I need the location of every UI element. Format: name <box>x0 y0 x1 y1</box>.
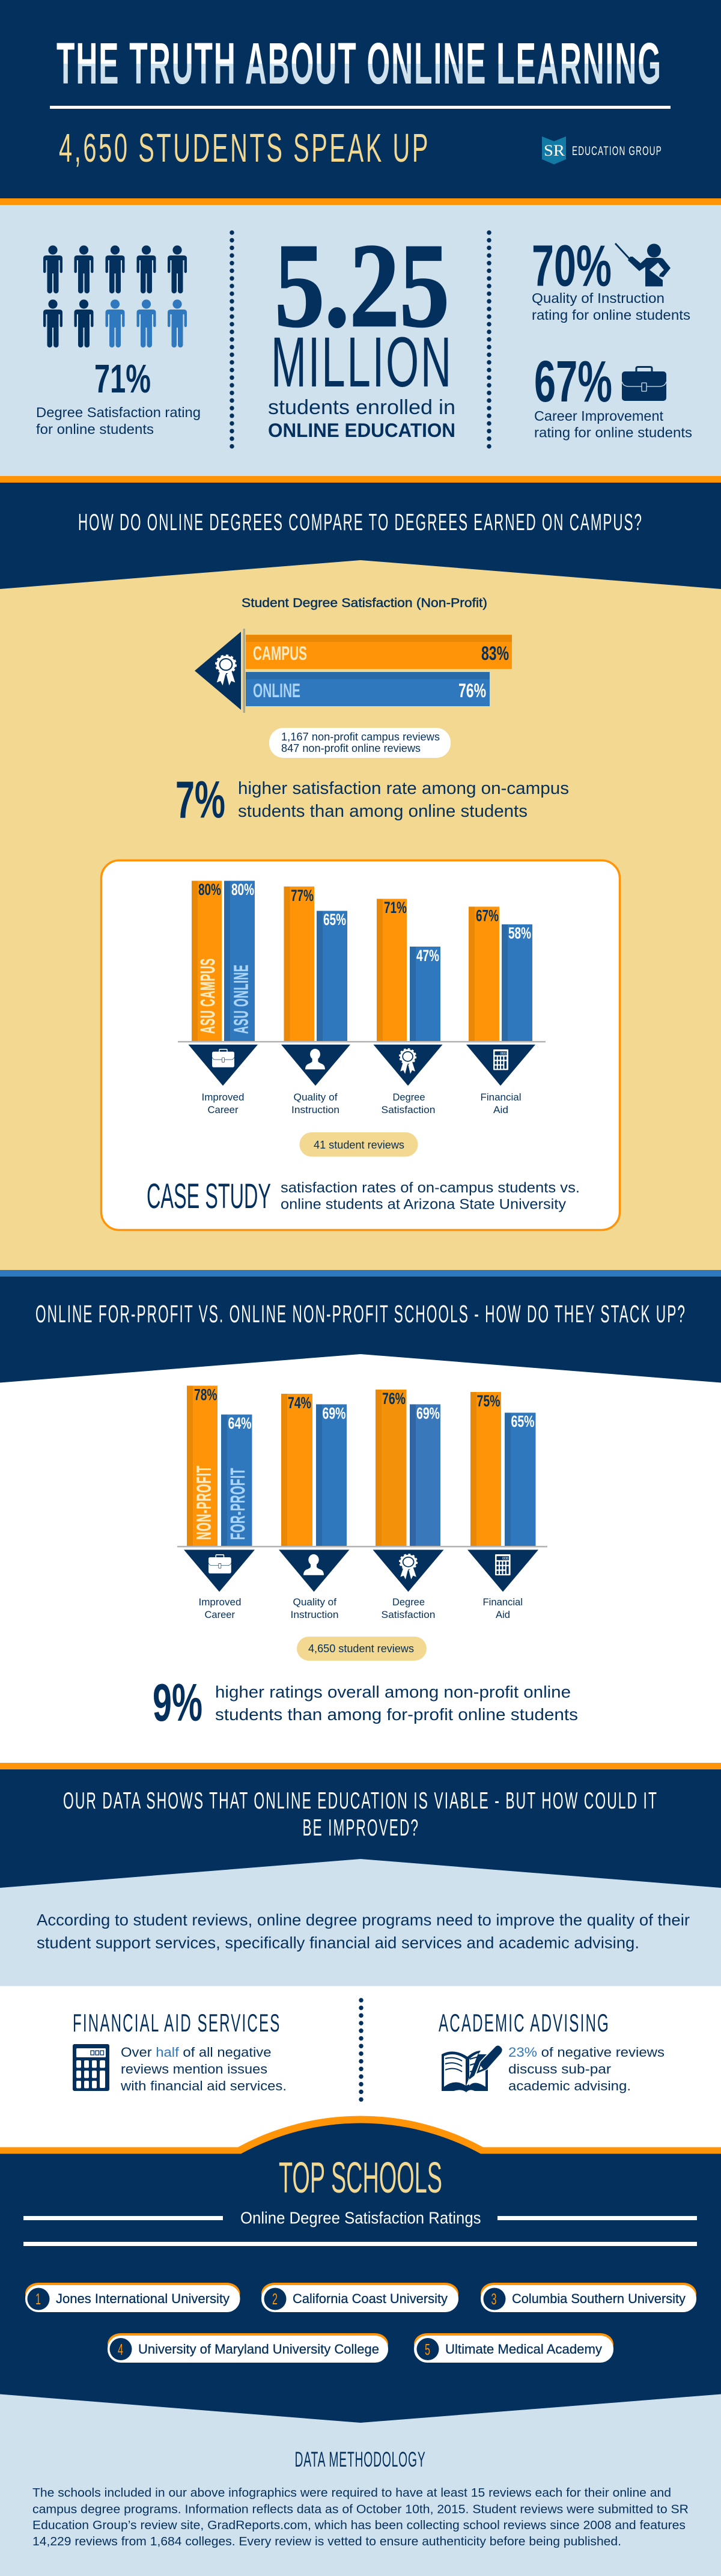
icon: award ribbon <box>216 656 236 685</box>
school 2: California Coast University <box>293 2291 448 2306</box>
school 4 <box>108 2333 388 2363</box>
bar chart: non-profit vs for-profit: 69% <box>416 1404 440 1422</box>
text: career improvement rating <box>534 408 692 440</box>
bar: online: 76% <box>458 680 486 701</box>
bar chart: ASU: ASU CAMPUS <box>196 958 219 1034</box>
icon: SR Education Group logo <box>542 136 662 165</box>
labels: categories: Career <box>204 1609 235 1620</box>
text <box>508 2045 665 2093</box>
icon: SR Education Group logo: EDUCATION GROUP <box>572 144 662 158</box>
school 5: 5 <box>425 2340 430 2358</box>
school 1 <box>25 2283 240 2312</box>
bar chart: non-profit vs for-profit: 78% <box>194 1386 218 1404</box>
school 3: 3 <box>491 2290 496 2308</box>
icon: teacher with pointer <box>615 243 671 286</box>
labels: categories: Career <box>208 1104 239 1116</box>
bar: campus <box>246 635 512 669</box>
panel: top schools <box>0 2116 721 2423</box>
text: career improvement rating: Career Improvement <box>534 408 663 424</box>
school 1: 1 <box>35 2290 41 2308</box>
icon row: category triangles <box>189 1045 535 1085</box>
labels: categories <box>198 1596 523 1620</box>
text: non-profit comparison: students than among for-profit online students <box>215 1705 578 1724</box>
bar chart: ASU: ASU ONLINE <box>230 965 252 1034</box>
subheading with rules <box>23 2208 697 2246</box>
text: career improvement rating: rating for online students <box>534 424 692 440</box>
text: non-profit comparison: higher ratings overall among non-profit online <box>215 1683 571 1701</box>
bar chart: ASU: 71% <box>384 899 407 917</box>
labels: categories: Instruction <box>291 1104 339 1116</box>
text: intro paragraph: student support services, specifically financial aid services and academic advising. <box>37 1934 639 1952</box>
text: quality of instruction rating <box>532 290 690 323</box>
text: methodology paragraph: campus degree programs. Information reflects data as of October 10th, 2015. Student reviews were submitted to SR <box>32 2503 689 2516</box>
text: satisfaction comparison <box>238 779 569 821</box>
bar: campus: CAMPUS <box>253 642 307 664</box>
school 3: Columbia Southern University <box>512 2291 686 2306</box>
labels: categories: Aid <box>496 1609 510 1620</box>
school 4: University of Maryland University College <box>138 2342 379 2357</box>
panel: page header <box>0 0 721 205</box>
heading: case study: CASE STUDY <box>147 1177 271 1216</box>
icon: SR Education Group logo: SR <box>544 142 565 159</box>
callout: review counts <box>269 728 451 758</box>
school 5 <box>414 2333 613 2363</box>
bar chart: non-profit vs for-profit: 74% <box>288 1394 311 1412</box>
bar chart: non-profit vs for-profit: 69% <box>322 1404 346 1422</box>
bar chart: ASU: 67% <box>476 906 499 924</box>
subheading with rules: Online Degree Satisfaction Ratings <box>240 2208 481 2227</box>
bar chart: non-profit vs for-profit: 75% <box>477 1392 500 1410</box>
panel: data methodology <box>32 2448 689 2548</box>
bar chart: degree satisfaction <box>195 629 512 713</box>
block: financial aid services <box>73 2009 287 2093</box>
stat: 9 percent: 9% <box>153 1673 202 1732</box>
bar: campus: 83% <box>481 642 509 664</box>
labels: categories: Instruction <box>291 1609 339 1620</box>
text: with financial aid services. <box>120 2078 287 2093</box>
stat: 5.25: 5.25 <box>275 219 449 352</box>
text: degree satisfaction rating <box>36 404 201 437</box>
text: satisfaction comparison: students than among online students <box>238 802 528 821</box>
labels: categories: Satisfaction <box>381 1104 435 1116</box>
icon: briefcase <box>622 367 666 401</box>
text: degree satisfaction rating: for online students <box>36 421 154 437</box>
block: academic advising <box>439 2009 665 2093</box>
text: non-profit comparison <box>215 1683 578 1724</box>
panel: how could it be improved <box>0 1763 721 2101</box>
bar chart: ASU <box>178 881 546 1042</box>
stat: million: MILLION <box>271 323 453 402</box>
text: case study description: online students at Arizona State University <box>281 1196 567 1213</box>
stat: 71 percent: 71% <box>94 356 151 401</box>
school 2: 2 <box>272 2290 278 2308</box>
panel: ASU case study <box>101 861 620 1230</box>
labels: categories: Satisfaction <box>381 1609 435 1620</box>
text: Over half of all negative <box>121 2045 272 2060</box>
text: online education: ONLINE EDUCATION <box>268 420 455 441</box>
text: intro paragraph: According to student reviews, online degree programs need to improve the quality of their <box>37 1911 690 1929</box>
heading: DATA METHODOLOGY <box>294 2448 425 2471</box>
labels: categories: Improved <box>202 1091 244 1103</box>
panel: key statistics <box>0 205 721 476</box>
labels: categories <box>202 1091 522 1116</box>
text: satisfaction comparison: higher satisfaction rate among on-campus <box>238 779 569 798</box>
callout: review counts: 847 non-profit online reviews <box>281 742 421 754</box>
text: intro paragraph <box>37 1911 690 1952</box>
text: methodology paragraph: 14,229 reviews from 1,684 colleges. Every review is vetted to ensure authenticity before being published. <box>32 2535 621 2548</box>
bar chart: non-profit vs for-profit <box>177 1386 547 1547</box>
labels: categories: Financial <box>481 1091 522 1103</box>
stat: 67 percent: 67% <box>534 349 612 414</box>
labels: categories: Quality of <box>293 1596 336 1608</box>
icon row: category triangles <box>184 1549 538 1592</box>
text: discuss sub-par <box>508 2062 612 2077</box>
callout: 4,650 student reviews <box>297 1637 427 1661</box>
text: reviews mention issues <box>121 2062 267 2077</box>
school 5: Ultimate Medical Academy <box>445 2342 602 2357</box>
bar chart: ASU: 80% <box>198 881 221 899</box>
bar chart: non-profit vs for-profit: 65% <box>511 1412 535 1430</box>
stat: 70 percent: 70% <box>532 233 612 298</box>
school 4: 4 <box>118 2340 123 2358</box>
chart title: Student Degree Satisfaction (Non-Profit) <box>242 596 487 610</box>
bar: online: ONLINE <box>253 680 300 701</box>
heading: FINANCIAL AID SERVICES <box>73 2009 281 2037</box>
heading: TOP SCHOOLS <box>279 2154 442 2202</box>
bar chart: ASU: 77% <box>291 887 314 905</box>
text: 23% of negative reviews <box>508 2045 665 2060</box>
school 2 <box>261 2283 458 2312</box>
school 3 <box>481 2283 696 2312</box>
callout: 4,650 student reviews: 4,650 student reviews <box>308 1643 414 1655</box>
labels: categories: Degree <box>392 1596 425 1608</box>
bar chart: non-profit vs for-profit: 76% <box>382 1390 406 1408</box>
stat: 7 percent: 7% <box>175 771 225 829</box>
text: degree satisfaction rating: Degree Satisfaction rating <box>36 404 201 420</box>
text: quality of instruction rating: Quality of Instruction <box>532 290 665 306</box>
bar chart: ASU: 65% <box>323 911 346 929</box>
callout: review counts: 1,167 non-profit campus reviews <box>281 731 440 743</box>
icon: people pictogram 71 percent <box>43 245 187 347</box>
text: students enrolled: students enrolled in <box>268 396 455 419</box>
bar chart: ASU: 80% <box>231 881 254 899</box>
text: methodology paragraph <box>32 2486 689 2548</box>
text: academic advising. <box>508 2078 631 2093</box>
heading: BE IMPROVED? <box>303 1815 419 1841</box>
bar chart: non-profit vs for-profit: NON-PROFIT <box>192 1465 215 1540</box>
callout: 41 student reviews: 41 student reviews <box>314 1139 404 1151</box>
text: case study description: satisfaction rates of on-campus students vs. <box>281 1180 580 1196</box>
labels: categories: Improved <box>198 1596 242 1608</box>
heading <box>63 1788 658 1841</box>
subtitle: 4,650 STUDENTS SPEAK UP <box>59 126 430 171</box>
bar chart: non-profit vs for-profit: 64% <box>228 1414 251 1432</box>
bar chart: ASU: 47% <box>416 947 439 965</box>
panel: data methodology background <box>0 2380 721 2576</box>
bar chart: non-profit vs for-profit: FOR-PROFIT <box>227 1468 249 1540</box>
text: methodology paragraph: Education Group’s review site, GradReports.com, which has been collecting school reviews since 2008 and features <box>32 2518 686 2532</box>
bar: online <box>246 672 490 706</box>
bar chart: ASU: 58% <box>508 924 531 942</box>
panel: for-profit vs non-profit <box>0 1270 721 1763</box>
labels: categories: Quality of <box>293 1091 338 1103</box>
panel: online vs campus <box>0 476 721 1271</box>
labels: categories: Degree <box>393 1091 425 1103</box>
icon: book and pencil <box>442 2045 502 2092</box>
text <box>120 2045 287 2093</box>
text: case study description <box>281 1180 580 1213</box>
icon: calculator <box>73 2044 109 2091</box>
text: quality of instruction rating: rating for online students <box>532 307 690 323</box>
labels: categories: Financial <box>483 1596 523 1608</box>
school 1: Jones International University <box>56 2291 230 2306</box>
text: methodology paragraph: The schools included in our above infographics were required to have at least 15 reviews each for their online and <box>32 2486 671 2500</box>
labels: categories: Aid <box>493 1104 508 1116</box>
callout: 41 student reviews <box>299 1132 418 1156</box>
